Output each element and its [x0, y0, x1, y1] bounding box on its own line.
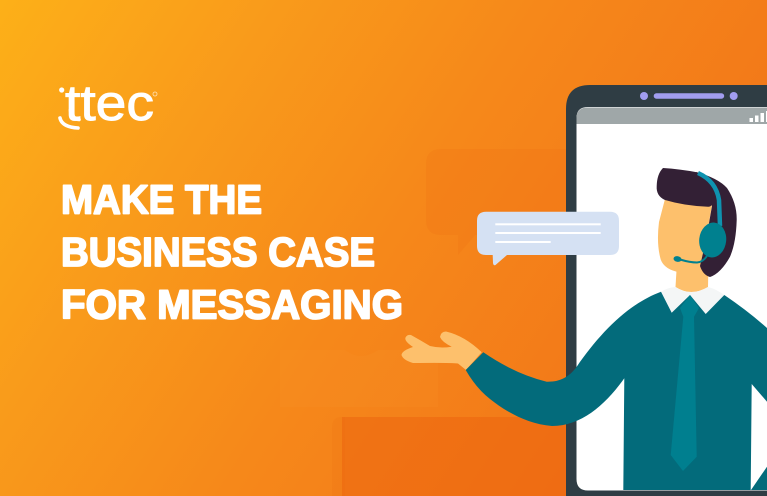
- hand: [402, 332, 482, 370]
- microphone tip: [673, 256, 682, 262]
- bubble shape: [477, 212, 619, 265]
- bubble text lines: [495, 223, 601, 243]
- body and arm: [466, 292, 767, 490]
- logo arcs: [60, 110, 79, 128]
- neck: [676, 262, 708, 292]
- faint background bubble: top: [426, 149, 570, 255]
- hair back: [696, 172, 737, 277]
- registered mark: [153, 92, 157, 96]
- status bar: [576, 108, 767, 124]
- title line 1: MAKE THE: [61, 176, 262, 222]
- faint background bubble: middle: [280, 350, 438, 407]
- title line 2: BUSINESS CASE: [61, 229, 375, 275]
- phone: [566, 85, 767, 496]
- tie: [671, 295, 699, 471]
- faint background block: lower left edge: [332, 417, 345, 496]
- logo dot: [59, 87, 64, 93]
- microphone boom: [680, 256, 707, 262]
- ear cup: [697, 221, 728, 259]
- faint background block: lower: [342, 417, 568, 496]
- collar: [661, 287, 724, 314]
- logo wordmark: ttec: [65, 75, 154, 131]
- headband: [698, 173, 720, 226]
- phone screen: [576, 107, 767, 490]
- title line 3: FOR MESSAGING: [61, 282, 403, 328]
- agent figure: [402, 168, 767, 490]
- speech bubble: [477, 212, 619, 265]
- face: [658, 199, 712, 272]
- title: [61, 176, 403, 328]
- speaker and sensors: [640, 92, 738, 100]
- signal bars: [750, 111, 767, 122]
- hair front: [657, 168, 712, 207]
- lower right body corner: [751, 467, 767, 490]
- phone body: [566, 85, 767, 496]
- logo: ttec: [59, 75, 157, 131]
